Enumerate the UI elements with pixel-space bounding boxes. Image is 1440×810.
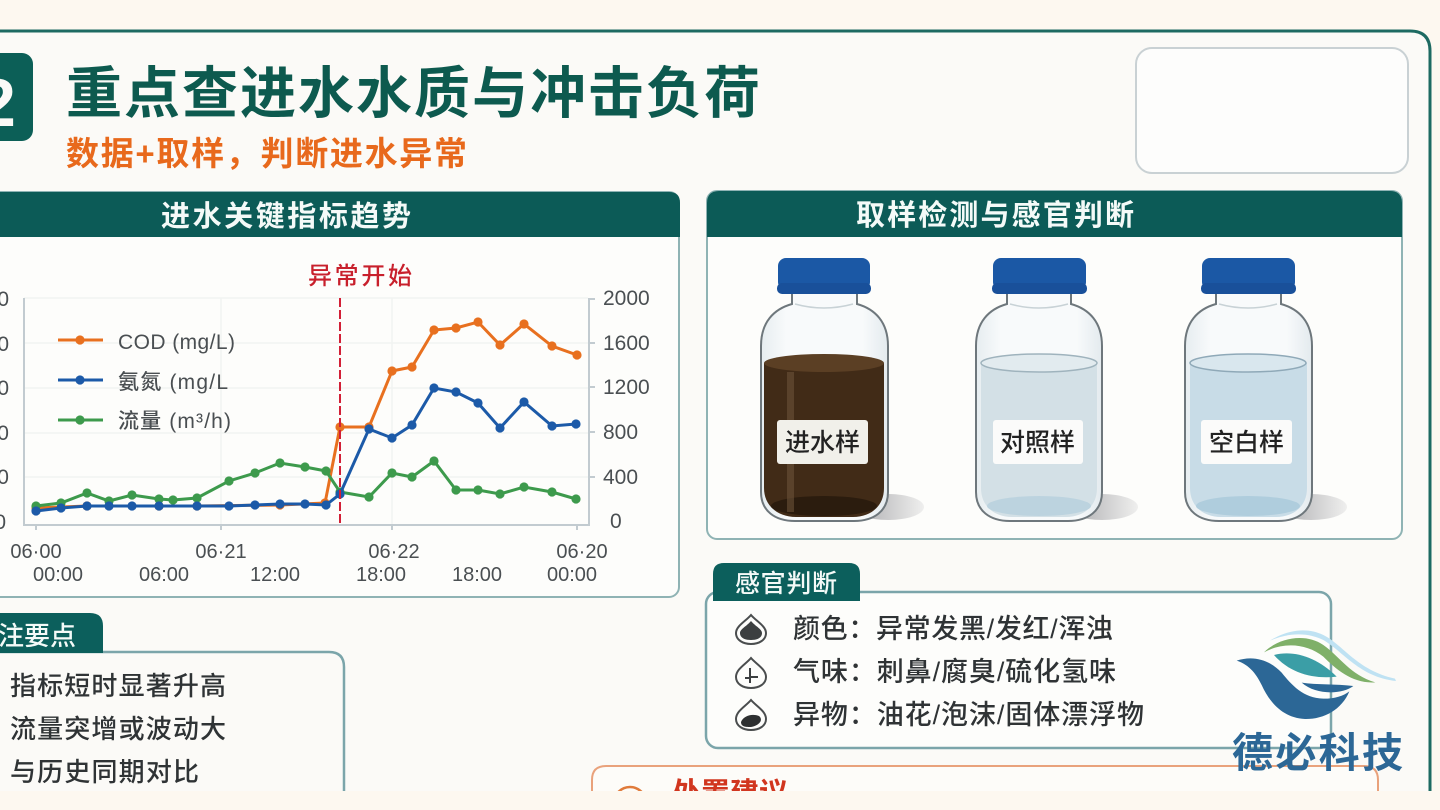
tab: attention points [0,613,103,653]
list of attention points [10,671,226,787]
panel: disposal advice [592,766,1378,810]
right axis labels: 1200 [603,376,650,399]
sensory text lines: 颜色：异常发黑/发红/浑浊 [793,614,1113,644]
chart legend: COD (mg/L) [118,331,235,354]
sensory text lines: 异物：油花/泡沫/固体漂浮物 [793,700,1144,730]
icon: odour drop [736,658,766,688]
anomaly marker line [339,298,341,525]
bottle: influent sample [761,258,924,521]
bottle label [777,420,868,464]
blank note box [1136,48,1408,173]
panel header: trend: 进水关键指标趋势 [161,200,411,233]
title: 重点查进水水质与冲击负荷 [66,62,760,125]
bottle label: 对照样 [1000,429,1075,457]
line chart [0,263,650,586]
series: ammonia nitrogen [36,388,576,511]
chart legend: 流量 (m³/h) [118,410,231,433]
right axis labels: 400 [603,466,638,489]
bottle label [1201,420,1292,464]
logo wordmark: 德必科技 [1232,730,1403,776]
panel: key attention points [0,613,344,791]
icon: colour drop [736,615,766,644]
tab: sensory judgement [713,563,860,601]
bottle label: 进水样 [785,429,860,457]
x axis labels: 12:00 [250,564,300,586]
x axis labels: 06·00 [10,541,62,563]
panel header: trend [0,192,680,237]
x axis labels: 00:00 [547,564,597,586]
sensory text lines [793,614,1144,730]
subtitle: 数据+取样，判断进水异常 [66,135,467,172]
right axis labels: 2000 [603,287,650,310]
x axis labels: 18:00 [452,564,502,586]
right axis labels: 800 [603,421,638,444]
series: flow [36,461,576,506]
right axis labels: 1600 [603,332,650,355]
x axis labels: 06·22 [368,541,420,563]
chart legend: 氨氮 (mg/L [118,371,228,394]
bottom band [0,791,1440,810]
tab: attention points: 注要点 [0,621,76,651]
bottle label: 空白样 [1209,429,1284,457]
sensory text lines: 气味：刺鼻/腐臭/硫化氢味 [793,657,1116,687]
list of attention points: 与历史同期对比 [10,757,199,787]
x axis labels: 00:00 [33,564,83,586]
series: COD [36,322,577,508]
panel: influent trend [0,192,680,597]
list of attention points: 指标短时显著升高 [10,671,226,701]
x axis labels: 06:00 [139,564,189,586]
right axis labels: 0 [610,510,622,533]
panel header: sampling: 取样检测与感官判断 [856,199,1134,232]
x axis labels: 06·21 [195,541,247,563]
logo [1232,630,1403,776]
bottle: blank sample [1185,258,1347,521]
list of attention points: 流量突增或波动大 [10,714,226,744]
left axis labels [0,288,9,534]
panel header: sampling [707,191,1402,237]
anomaly label: 异常开始 [308,263,412,290]
bottle label [993,420,1083,464]
chart legend [58,331,235,433]
number badge [0,53,33,141]
panel: sampling and sensory check [707,191,1402,539]
icon: foreign matter drop [736,700,766,730]
x axis labels: 18:00 [356,564,406,586]
x axis labels [10,541,608,586]
tab: sensory judgement: 感官判断 [735,570,837,598]
x axis labels: 06·20 [556,541,608,563]
bottle: control sample [976,258,1138,521]
logo mark [1237,630,1396,719]
icon: advice [614,787,646,810]
right axis labels [603,287,650,533]
advice heading: 处置建议 [672,777,788,810]
panel: sensory judgement [706,563,1331,748]
